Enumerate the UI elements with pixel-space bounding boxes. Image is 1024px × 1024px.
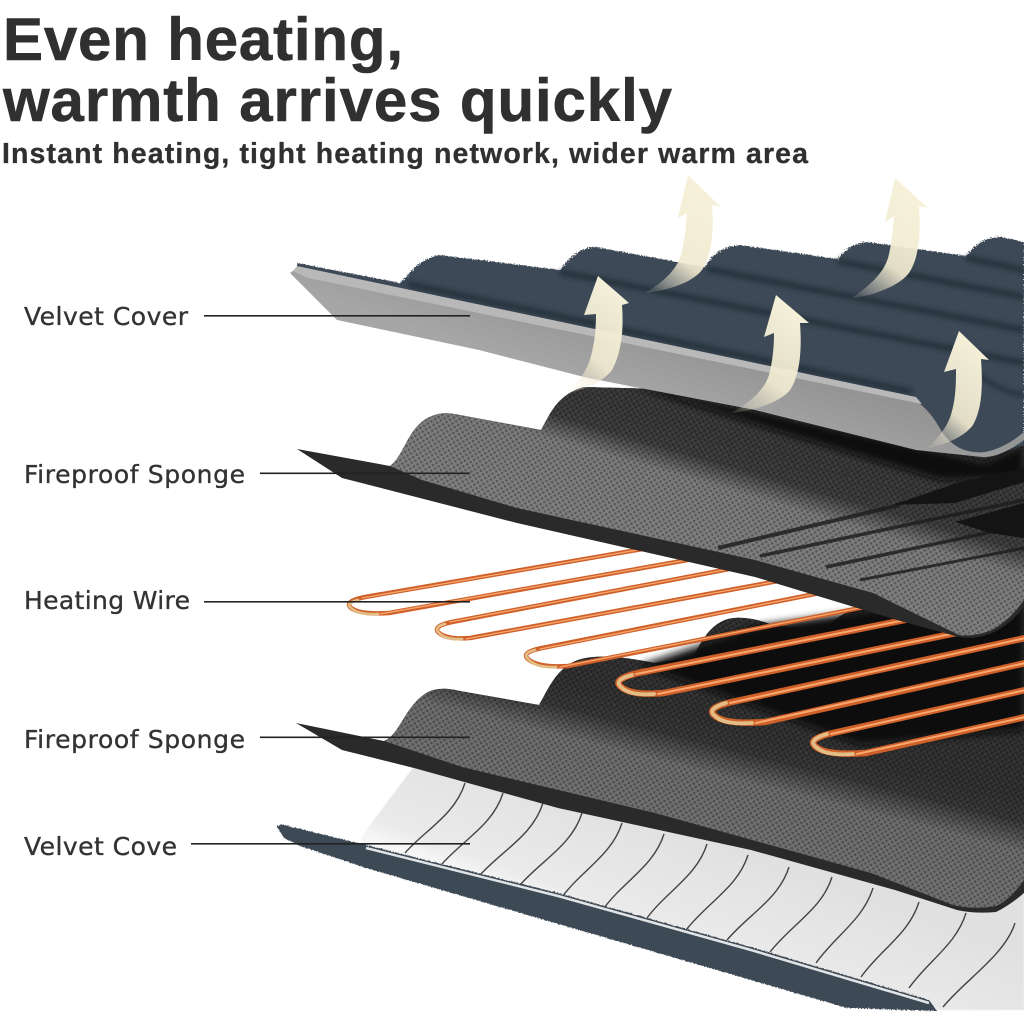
shadow below velvet cover (625, 384, 1024, 480)
subtitle: Instant heating, tight heating network, wider warm area (2, 138, 809, 170)
black shadow under wires (640, 590, 1024, 745)
wire loop 3 (526, 587, 900, 667)
grey foam side (290, 268, 1024, 457)
layer: lower fireproof sponge (296, 590, 1024, 913)
velvet strip (277, 825, 937, 1011)
label: Fireproof Sponge: Fireproof Sponge (24, 460, 245, 489)
white lining panel (361, 745, 1024, 1010)
layer: heating wire (349, 546, 1024, 754)
arrow: back right (852, 178, 928, 298)
layer: upper fireproof sponge (297, 384, 1024, 638)
wire loop 6 (813, 689, 1024, 754)
wire loop 4 (618, 611, 1000, 694)
arrow: front right (928, 331, 989, 448)
sponge top surface (384, 600, 1024, 908)
dark woven bands (892, 468, 1024, 505)
woven stripes (718, 500, 1024, 580)
arrow: back left (645, 175, 721, 293)
velvet ridges (408, 258, 1024, 395)
sponge silhouette (297, 387, 1024, 638)
layer: bottom velvet cover with white lining (277, 745, 1024, 1011)
arrow: front left (569, 276, 629, 393)
wire loop 2 (437, 565, 800, 639)
velvet pile surface (297, 237, 1024, 458)
label: Fireproof Sponge lower: Fireproof Sponge (24, 725, 245, 754)
title: Even heating, (3, 6, 403, 73)
wire loop 1 (349, 546, 710, 614)
label: Velvet Cover: Velvet Cover (24, 302, 189, 331)
sponge silhouette (296, 600, 1024, 913)
lighter foam edge (293, 266, 922, 404)
title (2, 6, 673, 134)
label: Heating Wire: Heating Wire (24, 586, 190, 615)
wire loop 5 (712, 637, 1024, 723)
lining stitch lines (405, 783, 1015, 1007)
label: Velvet Cove: Velvet Cove (24, 832, 177, 861)
layer: top velvet cover (290, 237, 1024, 458)
sponge top surface (390, 387, 1024, 635)
arrow: front middle (731, 295, 809, 413)
title: warmth arrives quickly (2, 67, 673, 134)
